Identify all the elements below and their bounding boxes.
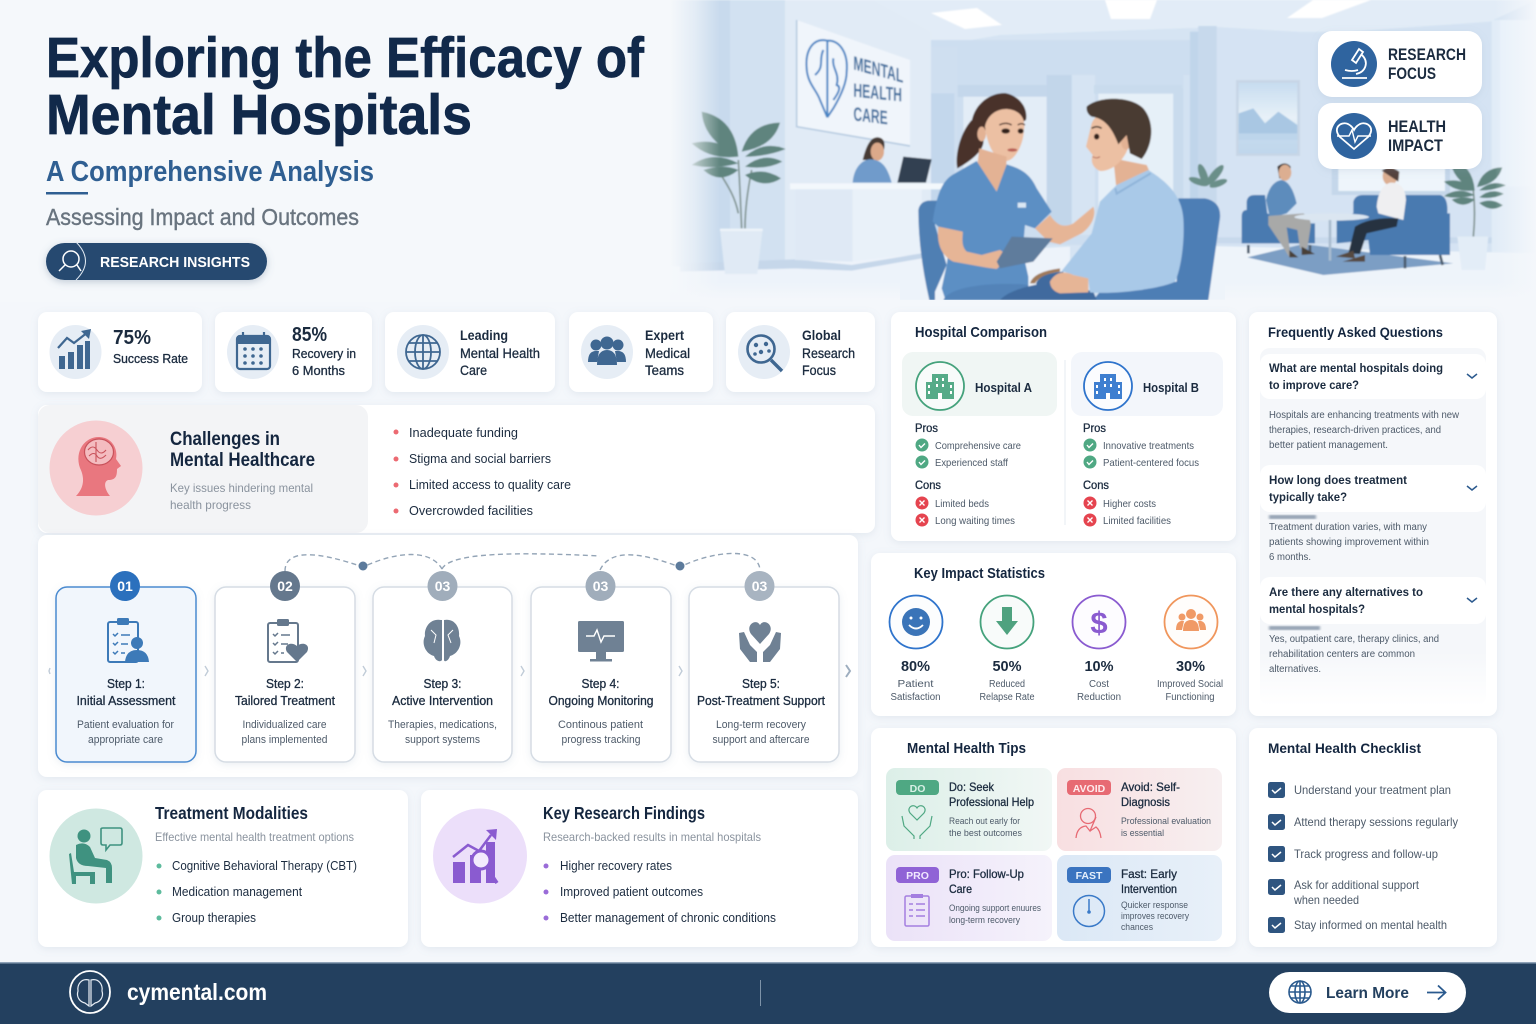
step 3 xyxy=(373,571,512,762)
title: Mental Hospitals xyxy=(46,83,472,147)
tip: fast: FAST xyxy=(1076,870,1103,882)
panel: treatment process steps xyxy=(38,535,858,777)
step 3: Active Intervention xyxy=(392,694,493,708)
tip: do: Do: Seek xyxy=(949,780,995,794)
badge: health impact: IMPACT xyxy=(1388,137,1443,155)
stat card: expert teams: Expert xyxy=(645,327,684,343)
treatment list: Cognitive Behavioral Therapy (CBT) xyxy=(172,858,357,873)
learn more button: Learn More xyxy=(1326,985,1409,1002)
icon: clipboard with heart xyxy=(268,619,308,662)
right plant xyxy=(1444,160,1506,270)
challenges list: Stigma and social barriers xyxy=(409,451,551,466)
title xyxy=(46,26,645,147)
findings list xyxy=(544,858,776,925)
step 4: Continous patient xyxy=(558,719,643,731)
badge: research focus: RESEARCH xyxy=(1388,46,1466,64)
nurse figure xyxy=(933,93,1094,300)
stat card: recovery: 6 Months xyxy=(292,363,345,378)
stat card: expert teams xyxy=(569,312,713,392)
tagline: Assessing Impact and Outcomes xyxy=(46,204,359,230)
checklist item 4 xyxy=(1268,878,1420,907)
step 1: 01 xyxy=(117,578,133,594)
tip: pro: Ongoing support enuures xyxy=(949,903,1041,914)
stat: cost reduction: Cost xyxy=(1089,679,1109,690)
tip: avoid: is essential xyxy=(1121,828,1164,839)
stat: social functioning: Functioning xyxy=(1166,692,1214,703)
tip: do: the best outcomes xyxy=(949,828,1022,839)
findings list: Better management of chronic conditions xyxy=(560,910,776,925)
step 1: Step 1: xyxy=(107,677,145,691)
subtitle: A Comprehensive Analysis xyxy=(46,156,374,188)
stat card: recovery: Recovery in xyxy=(292,346,356,361)
hospital A: Cons xyxy=(915,480,941,492)
challenges list xyxy=(394,425,571,518)
icon: monitor with pulse xyxy=(578,621,624,662)
step 1: Patient evaluation for xyxy=(77,719,174,731)
stat: patient satisfaction: Patient xyxy=(898,679,934,690)
wall sign: HEALTH xyxy=(853,80,902,107)
right side of room xyxy=(1175,14,1522,300)
question 1: better patient management. xyxy=(1269,440,1388,451)
tip: do: Professional Help xyxy=(949,795,1034,809)
question 2: Treatment duration varies, with many xyxy=(1269,522,1427,533)
checklist item 4: when needed xyxy=(1293,893,1359,907)
icon: chart with magnifier xyxy=(453,829,497,883)
tip: fast xyxy=(1057,855,1222,941)
question 3: mental hospitals? xyxy=(1269,602,1365,616)
wall sign: CARE xyxy=(853,103,888,129)
question 3: rehabilitation centers are common xyxy=(1269,649,1415,660)
tip: pro: long-term recovery xyxy=(949,915,1020,926)
panel: key impact statistics xyxy=(871,553,1236,716)
receptionist xyxy=(853,137,932,183)
patient figure xyxy=(1000,99,1184,300)
step 5: Step 5: xyxy=(742,677,780,691)
stat: patient satisfaction: 80% xyxy=(901,658,930,675)
badge: health impact xyxy=(1318,103,1482,169)
panel: mental health tips: Mental Health Tips xyxy=(907,740,1026,757)
stat card: global research: Research xyxy=(802,346,855,361)
stat card: recovery: 85% xyxy=(292,324,327,346)
checklist item 2: Attend therapy sessions regularly xyxy=(1294,815,1458,829)
reception desk xyxy=(790,183,943,262)
hospital B: Higher costs xyxy=(1103,498,1156,510)
tip: avoid: Professional evaluation xyxy=(1121,816,1211,827)
checklist item 4: Ask for additional support xyxy=(1294,878,1420,892)
icon: head with brain xyxy=(76,437,121,496)
stat card: leading care: Care xyxy=(460,363,487,378)
panel: mental health checklist: Mental Health Checklist xyxy=(1268,740,1421,756)
step 2: 02 xyxy=(277,578,293,594)
panel: frequently asked questions: Frequently Asked Questions xyxy=(1268,324,1443,340)
stat: relapse rate: 50% xyxy=(992,658,1022,675)
treatment list xyxy=(156,858,357,925)
challenges list: Inadequate funding xyxy=(409,425,518,440)
step 1: Initial Assessment xyxy=(76,694,176,708)
step 3: 03 xyxy=(435,578,450,594)
research insights pill xyxy=(46,242,267,280)
step 2: plans implemented xyxy=(242,734,328,746)
treatment list: Group therapies xyxy=(172,910,256,925)
stat card: leading care: Leading xyxy=(460,327,508,343)
dashed connector arrows xyxy=(285,553,760,571)
icon: clipboard with person xyxy=(108,618,149,662)
panel: hospital comparison xyxy=(891,312,1236,541)
step 4: progress tracking xyxy=(562,734,640,746)
question 1: to improve care? xyxy=(1269,378,1359,392)
question 3 xyxy=(1260,577,1486,675)
panel: treatment modalities: Treatment Modalities xyxy=(155,803,308,823)
question 2: patients showing improvement within xyxy=(1269,537,1429,548)
step 4: 03 xyxy=(593,578,608,594)
findings list: Improved patient outcomes xyxy=(560,884,703,899)
panel: hospital comparison: Hospital Comparison xyxy=(915,324,1047,341)
small plant by wall xyxy=(1188,163,1228,190)
stat: cost reduction: $ xyxy=(1090,605,1108,640)
challenges list: Limited access to quality care xyxy=(409,477,571,492)
question 3: alternatives. xyxy=(1269,664,1321,675)
panel: treatment modalities: Effective mental health treatment options xyxy=(155,830,354,844)
question 1: What are mental hospitals doing xyxy=(1269,361,1443,375)
tip: do: Reach out early for xyxy=(949,816,1020,827)
tip: do: DO xyxy=(910,783,925,795)
question 2: typically take? xyxy=(1269,490,1347,504)
stat card: global research: Focus xyxy=(802,363,836,378)
hospital A: Hospital A xyxy=(975,380,1033,395)
step 2: Individualized care xyxy=(242,719,326,731)
tip: pro: Pro: Follow-Up xyxy=(949,867,1024,881)
learn more button xyxy=(1269,972,1466,1013)
question 1 xyxy=(1260,354,1486,451)
checklist item 1: Understand your treatment plan xyxy=(1294,783,1451,797)
hospital A: Comprehensive care xyxy=(935,440,1021,452)
badge: research focus: FOCUS xyxy=(1388,65,1436,83)
back wall xyxy=(931,40,1188,244)
question 1: therapies, research-driven practices, and xyxy=(1269,425,1441,436)
stat card: leading care: Mental Health xyxy=(460,346,540,361)
question 3: Are there any alternatives to xyxy=(1269,585,1423,599)
stat: cost reduction xyxy=(1072,596,1126,703)
panel: key research findings: Research-backed results in mental hospitals xyxy=(543,830,761,844)
tip: fast: Intervention xyxy=(1121,882,1177,896)
findings list: Higher recovery rates xyxy=(560,858,672,873)
stat: patient satisfaction: Satisfaction xyxy=(890,692,940,703)
hospital A: Pros xyxy=(915,423,938,435)
question 2 xyxy=(1260,465,1486,563)
tip: avoid: Diagnosis xyxy=(1121,795,1170,809)
panel: treatment modalities xyxy=(38,790,408,947)
tip: do xyxy=(886,768,1052,851)
tip: pro: Care xyxy=(949,882,972,896)
hospital B: Limited facilities xyxy=(1103,515,1171,527)
step 5: support and aftercare xyxy=(712,734,810,746)
hospital A: Long waiting times xyxy=(935,515,1015,527)
stat: social functioning xyxy=(1157,596,1223,703)
stat: relapse rate xyxy=(980,596,1035,703)
panel: mental health tips xyxy=(871,728,1236,947)
treatment list: Medication management xyxy=(172,884,302,899)
footer bar: cymental.com xyxy=(127,979,267,1005)
panel: key research findings xyxy=(421,790,858,947)
step 2 xyxy=(215,571,355,762)
footer logo: brain xyxy=(70,971,110,1013)
hospital A: Limited beds xyxy=(935,498,989,510)
back wall details xyxy=(959,76,1174,234)
step 5: Post-Treatment Support xyxy=(697,694,825,708)
tip: fast: Fast: Early xyxy=(1121,867,1177,881)
step 5: 03 xyxy=(752,578,767,594)
step 4: Ongoing Monitoring xyxy=(548,694,654,708)
panel: challenges in mental healthcare: health progress xyxy=(170,498,251,512)
stat: patient satisfaction xyxy=(890,596,942,703)
tip: fast: Quicker response xyxy=(1121,900,1188,911)
hospital B xyxy=(1071,352,1223,527)
icon: heart in hands xyxy=(739,622,781,662)
step 3: Step 3: xyxy=(424,677,462,691)
checklist item 3: Track progress and follow-up xyxy=(1294,847,1438,861)
panel: key impact statistics: Key Impact Statistics xyxy=(914,565,1045,582)
stat card: success rate: Success Rate xyxy=(113,351,188,366)
stat card: leading care xyxy=(385,312,555,392)
challenges list: Overcrowded facilities xyxy=(409,503,533,518)
tip: pro xyxy=(886,855,1052,941)
step 3: support systems xyxy=(405,734,480,746)
hospital B: Cons xyxy=(1083,480,1109,492)
stat card: global research: Global xyxy=(802,327,841,343)
hospital B: Patient-centered focus xyxy=(1103,457,1199,469)
stat: cost reduction: Reduction xyxy=(1077,692,1121,703)
tip: avoid: Avoid: Self- xyxy=(1121,780,1180,794)
stat card: expert teams: Medical xyxy=(645,346,690,361)
question 2: 6 months. xyxy=(1269,552,1311,563)
question 3: Yes, outpatient care, therapy clinics, and xyxy=(1269,634,1439,645)
stat: relapse rate: Reduced xyxy=(989,679,1025,690)
painting xyxy=(1236,80,1300,156)
nurse and patient xyxy=(918,93,1220,300)
step 5: Long-term recovery xyxy=(716,719,806,731)
icon: brain xyxy=(424,620,460,661)
stat: social functioning: Improved Social xyxy=(1157,679,1223,690)
tip: pro: PRO xyxy=(906,870,929,882)
tip: fast: improves recovery xyxy=(1121,911,1189,922)
ceiling xyxy=(876,0,1508,40)
step 2: Tailored Treatment xyxy=(235,694,335,708)
badge: health impact: HEALTH xyxy=(1388,118,1446,136)
chevrons between steps xyxy=(49,665,850,677)
left plant xyxy=(692,112,786,274)
stat card: success rate: 75% xyxy=(113,327,151,349)
panel: challenges in mental healthcare xyxy=(38,405,875,533)
hospital B: Pros xyxy=(1083,423,1106,435)
hospital A: Experienced staff xyxy=(935,457,1008,469)
checklist item 5: Stay informed on mental health xyxy=(1294,918,1447,932)
step 5 xyxy=(689,571,839,762)
ceiling lights xyxy=(931,0,1371,29)
wall sign: MENTAL xyxy=(853,53,903,88)
footer bar xyxy=(0,962,1536,1024)
question 2: How long does treatment xyxy=(1269,473,1407,487)
nurse chair xyxy=(918,201,947,300)
step 4: Step 4: xyxy=(582,677,620,691)
stat card: success rate xyxy=(38,312,202,392)
waiting area seating xyxy=(1242,163,1453,275)
panel: challenges in mental healthcare: Key issues hindering mental xyxy=(170,481,313,495)
stat: relapse rate: Relapse Rate xyxy=(980,692,1035,703)
panel: challenges in mental healthcare: Challenges in xyxy=(170,429,280,450)
question 1: Hospitals are enhancing treatments with new xyxy=(1269,410,1460,421)
badge: research focus xyxy=(1318,31,1482,97)
icon: person in therapy xyxy=(69,828,122,884)
step 2: Step 2: xyxy=(266,677,304,691)
step 4 xyxy=(531,571,671,762)
stat card: recovery xyxy=(215,312,372,392)
tip: avoid xyxy=(1057,768,1222,851)
step 1 xyxy=(56,571,196,762)
stat card: expert teams: Teams xyxy=(645,363,684,378)
research insights pill: RESEARCH INSIGHTS xyxy=(100,254,250,271)
step 3: Therapies, medications, xyxy=(388,719,497,731)
wall sign xyxy=(797,20,910,146)
tip: avoid: AVOID xyxy=(1073,783,1106,795)
hospital B: Innovative treatments xyxy=(1103,440,1194,452)
panel: key research findings: Key Research Findings xyxy=(543,803,705,823)
left wall and floor xyxy=(670,0,1070,300)
panel: challenges in mental healthcare: Mental Healthcare xyxy=(170,450,315,471)
panel: frequently asked questions xyxy=(1249,312,1497,716)
hospital A xyxy=(902,352,1057,527)
hospital B: Hospital B xyxy=(1143,380,1199,395)
title: Exploring the Efficacy of xyxy=(46,26,645,90)
stat: social functioning: 30% xyxy=(1176,658,1205,675)
panel: mental health checklist xyxy=(1249,728,1497,947)
hero illustration: clinic lobby xyxy=(670,0,1536,300)
stat card: global research xyxy=(726,312,875,392)
tip: fast: chances xyxy=(1121,922,1153,933)
patient chair xyxy=(1093,198,1220,300)
stat: cost reduction: 10% xyxy=(1084,658,1114,675)
step 1: appropriate care xyxy=(88,734,163,746)
